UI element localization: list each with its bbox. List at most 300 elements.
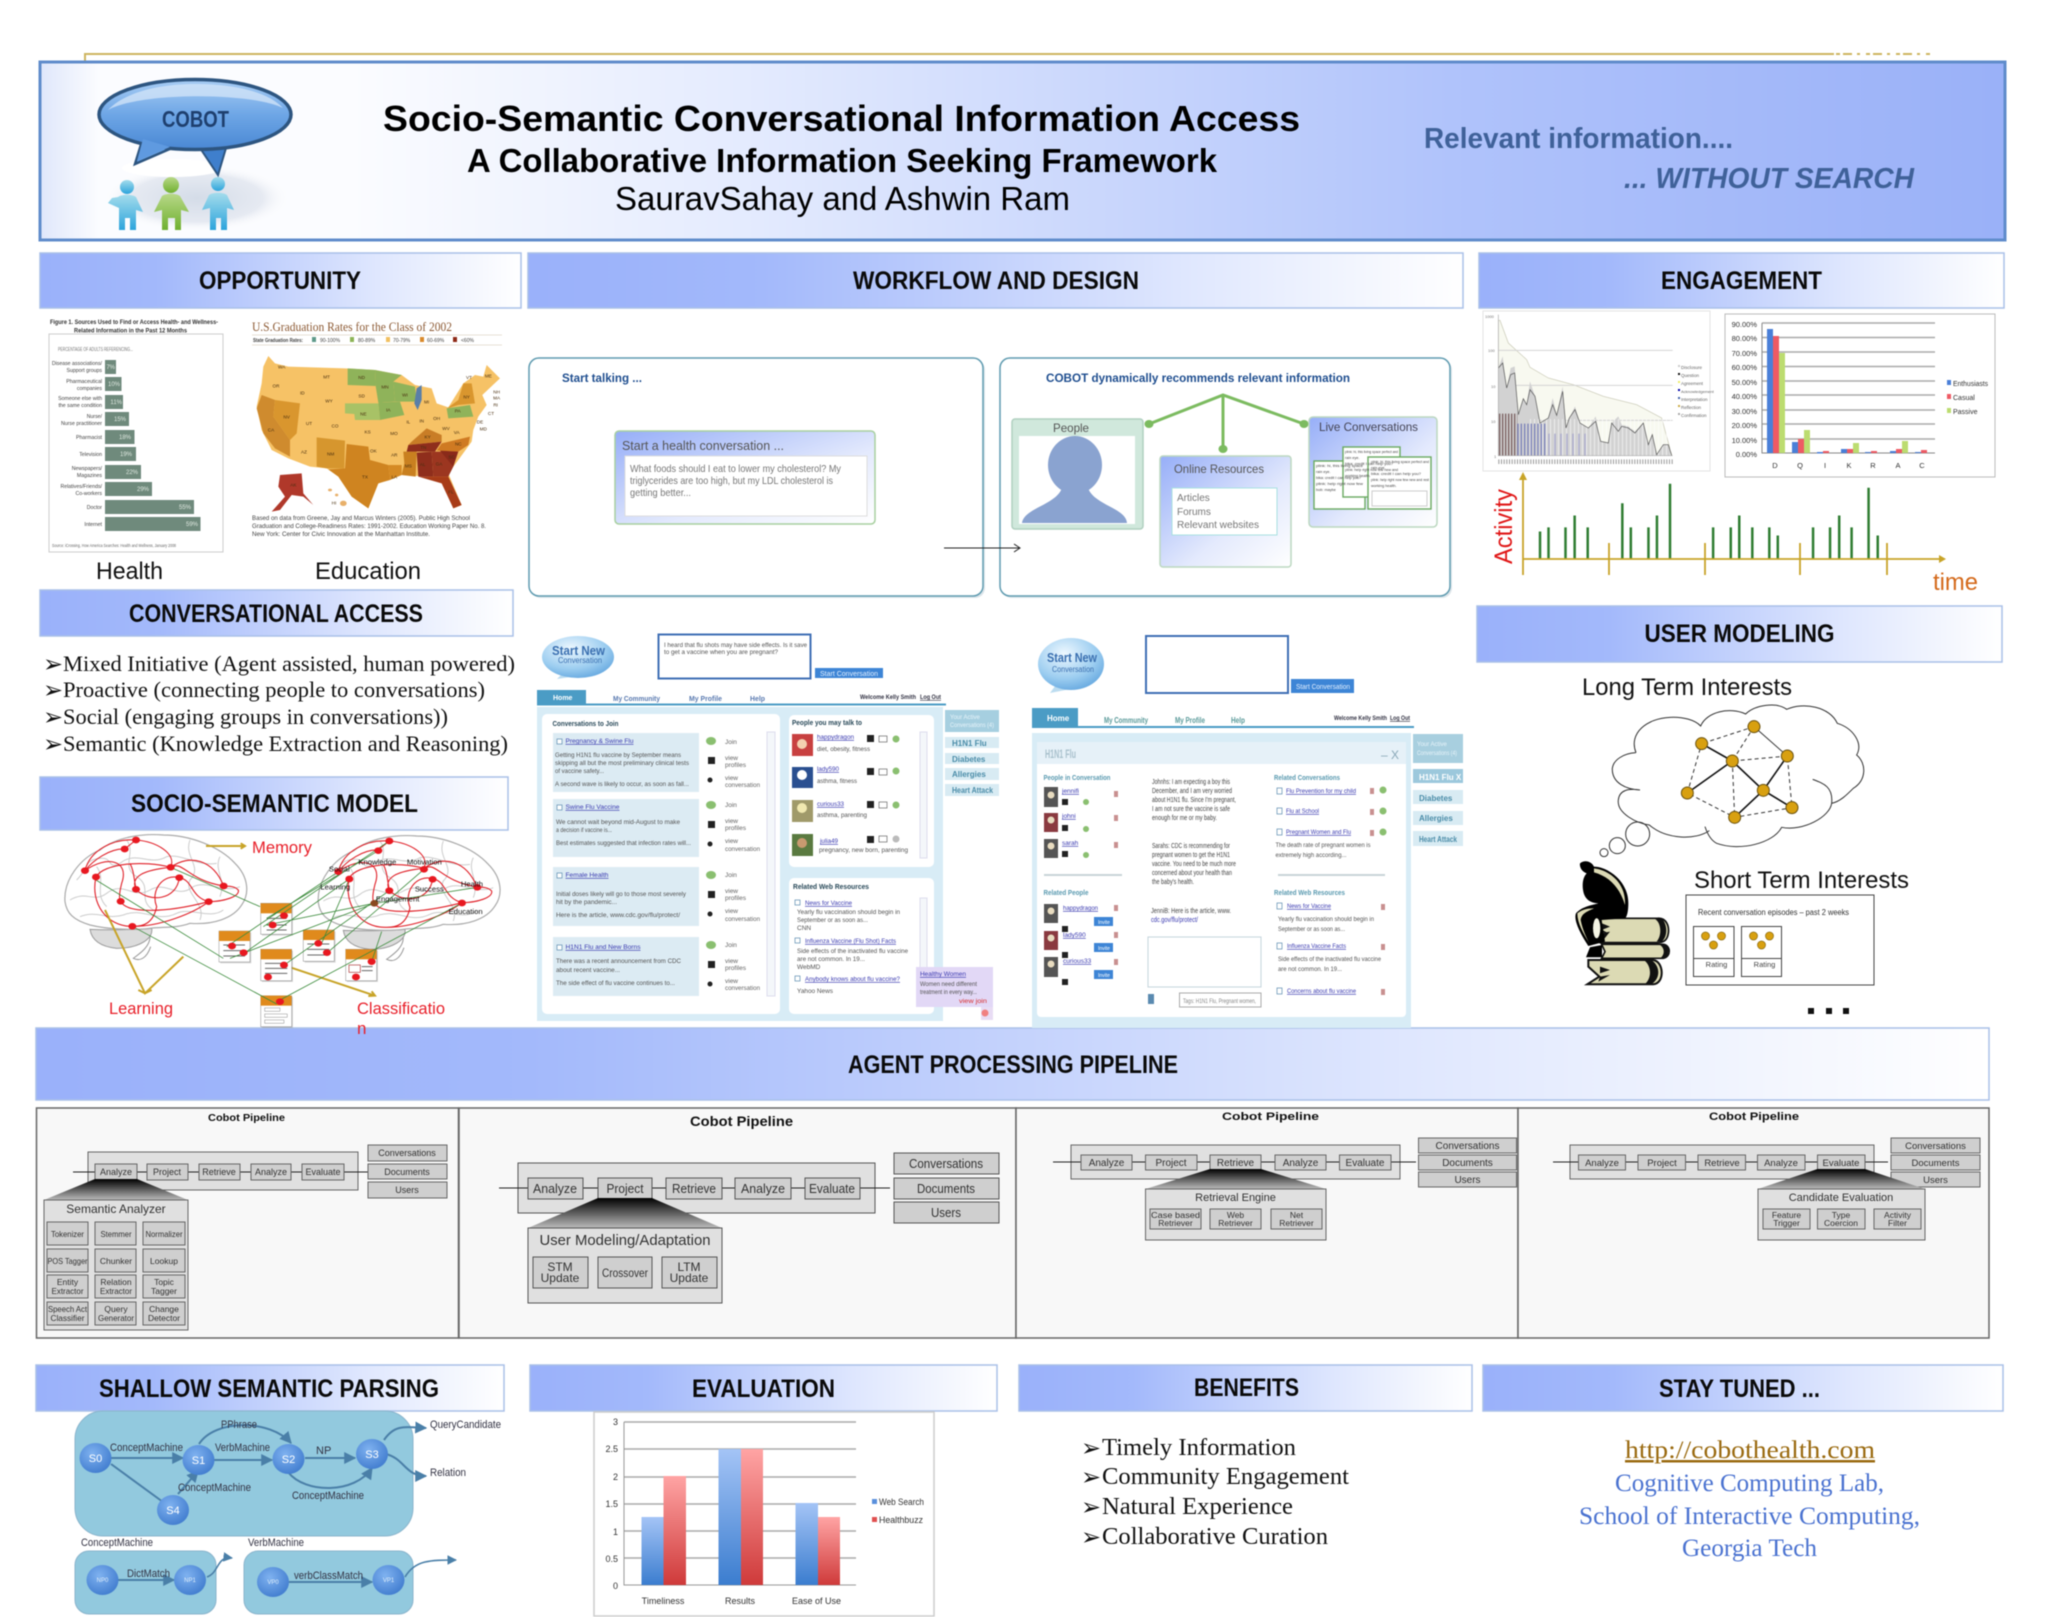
panel: pipeline candidate evaluation: Analyze [1764, 1158, 1798, 1169]
related conversations: extremely high according... [1276, 852, 1347, 859]
panel: engagement bar chart: 80.00% [1732, 334, 1757, 343]
heading: user modeling [1477, 606, 2002, 662]
panel: start talking [529, 358, 985, 598]
people you may talk to: asthma, parenting [817, 812, 867, 819]
navigation bar: Welcome Kelly Smith [1334, 715, 1387, 722]
panel: engagement bar chart: Q [1797, 461, 1803, 470]
panel: US graduation rates map: 60-69% [427, 338, 445, 344]
panel: health bar chart: 19% [120, 452, 133, 458]
panel: health bar chart: Newspapers/ [72, 466, 103, 472]
navigation bar: My Community [1104, 716, 1148, 725]
panel: US graduation rates map: ME [485, 374, 492, 379]
conversations to join: conversation [725, 846, 760, 853]
panel: pipeline semantic analyzer: Normalizer [146, 1229, 183, 1239]
panel: engagement bar chart: Enthusiasts [1953, 381, 1988, 388]
conversations to join: about recent vaccine... [556, 967, 620, 974]
panel: pipeline user modeling: Documents [917, 1181, 975, 1196]
conversations to join: profiles [725, 965, 747, 972]
panel: health bar chart: Television [79, 452, 102, 458]
conversations to join: view [725, 888, 738, 895]
card: online resources: Relevant websites [1177, 520, 1259, 531]
text block: stay tuned contact: School of Interactive Computing, [1579, 1503, 1920, 1530]
panel: health bar chart: 29% [137, 487, 150, 493]
icon: thinker on books [1575, 861, 1669, 984]
panel: pipeline user modeling: User Modeling/Adaptation [540, 1232, 710, 1249]
concept labels: Education [449, 907, 483, 916]
green connections [96, 841, 477, 1004]
panel: US graduation rates map: MS [405, 463, 412, 468]
panel: pipeline user modeling [459, 1108, 1016, 1338]
panel: health bar chart: 7% [106, 365, 116, 371]
text block: conversational access list: Social (engaging groups in conversations)) [63, 704, 448, 729]
card: live conversations: plink: help right now few [1316, 482, 1363, 486]
panel: engagement dialogue act line chart: 1000 [1485, 314, 1495, 319]
header banner [40, 62, 2005, 240]
card: start a health conversation [615, 431, 875, 524]
panel: engagement dialogue act line chart: Disclosure [1681, 365, 1703, 370]
panel: engagement bar chart [1725, 314, 1995, 477]
panel: US graduation rates map: 90-100% [320, 338, 341, 344]
concept labels: Knowledge [358, 858, 396, 867]
chat transcript: concerned about your health than [1152, 870, 1232, 877]
ellipsis [1808, 1008, 1849, 1014]
diagram: shallow semantic parser state machine: S1 [192, 1455, 205, 1467]
panel: pipeline candidate evaluation: Project [1647, 1158, 1677, 1169]
conversations to join: view [725, 775, 738, 782]
conversations to join: Pregnancy & Swine Flu [566, 738, 634, 745]
heading: workflow and design [528, 253, 1463, 308]
icon: start new conversation bubble: Conversation [558, 656, 602, 665]
topic sidebar: Heart Attack [952, 786, 993, 795]
panel: pipeline user modeling: Crossover [602, 1266, 648, 1280]
panel: US graduation rates map: MA [493, 395, 501, 400]
chat transcript: Sarahs: CDC is recommending for [1152, 843, 1230, 850]
panel: health bar chart: Pharmacist [76, 435, 103, 441]
card: live conversations: bob: maybe [1316, 488, 1336, 492]
conversations to join: There was a recent announcement from CDC [556, 958, 681, 965]
concept labels: Learning [320, 882, 350, 891]
popup: healthy women: view join [959, 998, 987, 1005]
card: start a health conversation: Start a health conversation ... [622, 438, 784, 453]
panel: screenshot home page: I heard that flu shots may have side effects. Is it save [664, 642, 807, 649]
navigation bar [537, 690, 946, 705]
panel: US graduation rates map: IL [406, 419, 411, 424]
chat transcript: December, and I am very worried [1152, 788, 1232, 795]
label: classification: Classificatio [357, 999, 445, 1018]
diagram: shallow semantic parser state machine: S2 [282, 1454, 295, 1466]
panel: US graduation rates map: VA [454, 430, 460, 435]
conversations to join: conversation [725, 916, 760, 923]
chart: evaluation bar chart: Healthbuzz [879, 1515, 923, 1525]
panel: pipeline candidate evaluation: Feature [1772, 1210, 1801, 1220]
related web resources: are not common. In 19... [797, 956, 865, 963]
panel: US graduation rates map: AK [290, 483, 297, 488]
diagram: shallow semantic parser state machine: NP0 [97, 1578, 109, 1584]
panel: engagement bar chart: 90.00% [1732, 320, 1757, 329]
chart: evaluation bar chart: Timeliness [642, 1596, 685, 1606]
people you may talk to [792, 718, 927, 858]
people you may talk to: asthma, fitness [817, 778, 858, 785]
heading: socio-semantic model [40, 777, 508, 830]
card: live conversations: rain eye. [1316, 470, 1331, 474]
icon: start new conversation bubble: Conversation [1052, 665, 1094, 674]
panel: pipeline candidate evaluation: Documents [1911, 1158, 1960, 1169]
related conversations: are not common. In 19... [1278, 966, 1342, 973]
panel: US graduation rates map: OH [433, 416, 440, 421]
panel: US graduation rates map: SD [358, 394, 366, 399]
conversations to join: profiles [725, 895, 747, 902]
conversations to join: hit by the pandemic... [556, 899, 617, 906]
panel: pipeline retrieval engine: Retrieval Engine [1195, 1192, 1276, 1204]
panel: pipeline user modeling: Project [606, 1181, 644, 1196]
chart: evaluation bar chart: 0 [613, 1581, 618, 1591]
heading: conversational access: CONVERSATIONAL ACCESS [129, 600, 423, 628]
panel: US graduation rates map: 70-79% [393, 338, 411, 344]
panel: pipeline retrieval engine: Retriever [1158, 1218, 1193, 1228]
panel: US graduation rates map: TN [420, 445, 426, 450]
text block: benefits list: Natural Experience [1102, 1494, 1293, 1520]
related web resources: Yahoo News [797, 988, 834, 995]
panel: pipeline semantic analyzer: Classifier [50, 1313, 85, 1323]
title: Socio-Semantic Conversational Information Access [383, 98, 1300, 139]
heading: shallow semantic parsing [36, 1365, 504, 1411]
card: live conversations: plink: help right now few new and [1345, 468, 1398, 472]
panel: engagement dialogue act line chart: Agreement [1681, 381, 1704, 386]
title: SauravSahay and Ashwin Ram [615, 180, 1070, 217]
people in conversation: Invite [1098, 920, 1110, 926]
panel: pipeline user modeling: Analyze [533, 1181, 577, 1196]
heading: opportunity [40, 253, 521, 308]
diagram: shallow semantic parser state machine: VerbMachine [215, 1442, 270, 1454]
icon: brain right [318, 836, 500, 961]
people you may talk to: lady590 [817, 766, 839, 773]
card: start a health conversation: getting better... [630, 487, 691, 499]
conversations to join: Initial doses likely will go to those most severely [556, 891, 687, 898]
heading: shallow semantic parsing: SHALLOW SEMANTIC PARSING [99, 1375, 439, 1403]
text block: stay tuned contact: http://cobothealth.com [1625, 1437, 1876, 1464]
panel: pipeline retrieval engine: Retriever [1279, 1218, 1314, 1228]
panel: health bar chart: the same condition [58, 403, 102, 409]
tagline: ... WITHOUT SEARCH [1624, 163, 1915, 195]
panel: recent episodes: Rating [1754, 960, 1775, 969]
conversations to join: We cannot wait beyond mid-August to make [556, 819, 680, 826]
related conversations: Pregnant Women and Flu [1286, 829, 1351, 836]
card: live conversations [1309, 417, 1437, 527]
title: A Collaborative Information Seeking Framework [467, 142, 1218, 179]
heading: conversational access [40, 590, 513, 636]
panel: pipeline semantic analyzer: Stemmer [100, 1229, 132, 1239]
panel: pipeline semantic analyzer: Semantic Analyzer [66, 1202, 166, 1216]
panel: pipeline retrieval engine: Conversations [1436, 1141, 1499, 1152]
panel: pipeline semantic analyzer: Evaluate [305, 1167, 341, 1177]
panel: engagement dialogue act line chart: 10 [1491, 384, 1496, 389]
heading: evaluation: EVALUATION [692, 1375, 835, 1403]
conversations to join: The side effect of flu vaccine continues to... [556, 980, 675, 987]
panel: pipeline candidate evaluation: Trigger [1773, 1218, 1800, 1228]
panel: pipeline semantic analyzer: Documents [384, 1167, 430, 1177]
panel: US graduation rates map: CO [331, 424, 339, 429]
diagram: shallow semantic parser state machine: DictMatch [127, 1568, 170, 1580]
red nodes [81, 837, 481, 1005]
topic sidebar: Diabetes [1419, 794, 1453, 803]
panel: US graduation rates map: KS [365, 429, 371, 434]
card: live conversations: bika: credit I can help you? [1316, 476, 1361, 480]
conversations to join: Here is the article, www.cdc.gov/flu/protect/ [556, 912, 680, 919]
chart: evaluation bar chart: Results [725, 1596, 756, 1606]
topic sidebar: H1N1 Flu X [1419, 773, 1462, 782]
text block: benefits list [1081, 1434, 1349, 1551]
panel: US graduation rates map: IN [419, 418, 424, 423]
panel: health bar chart: Figure 1. Sources Used to Find or Access Health- and Wellness- [50, 319, 218, 326]
people in conversation: sarah [1062, 840, 1079, 847]
text block: conversational access list: ➢ [43, 703, 63, 731]
popup: healthy women: Healthy Women [920, 971, 966, 978]
panel: pipeline user modeling: Retrieve [672, 1181, 716, 1196]
panel: US graduation rates map: FL [448, 489, 454, 494]
conversations to join: view [725, 755, 738, 762]
conversations to join: Join [725, 739, 737, 746]
diagram: shallow semantic parser state machine: VP0 [267, 1580, 279, 1586]
panel: health bar chart: Disease associations/ [52, 361, 103, 367]
chat transcript: vaccine. You need to be much more [1152, 861, 1236, 868]
panel: engagement bar chart: 70.00% [1732, 349, 1757, 358]
icon: start new conversation bubble: Start New [1047, 650, 1098, 665]
panel: pipeline semantic analyzer: Analyze [100, 1167, 132, 1177]
heading: evaluation [530, 1365, 997, 1411]
diagram: shallow semantic parser state machine: S0 [89, 1453, 102, 1465]
icon: thought cloud [1600, 705, 1864, 857]
panel: US graduation rates map: AR [391, 453, 398, 458]
panel: US graduation rates map: MD [480, 427, 488, 432]
card: live conversations: bika: credit I can help you? [1371, 472, 1421, 476]
navigation bar: Help [750, 696, 765, 703]
card: online resources: Online Resources [1174, 462, 1264, 476]
panel: US graduation rates map: TX [362, 474, 369, 479]
related web resources: Influenza Vaccine (Flu Shot) Facts [805, 938, 897, 945]
panel: engagement bar chart: C [1919, 461, 1925, 470]
panel: US graduation rates map: MO [390, 431, 398, 436]
diagram: shallow semantic parser state machine: ConceptMachine [292, 1490, 364, 1502]
panel: pipeline semantic analyzer: Users [395, 1185, 419, 1195]
panel: pipeline candidate evaluation: Activity [1884, 1210, 1912, 1220]
panel: pipeline semantic analyzer: Retrieve [202, 1167, 236, 1177]
panel: pipeline retrieval engine: Cobot Pipeline [1222, 1111, 1319, 1123]
navigation bar: Help [1231, 716, 1245, 725]
people you may talk to: curious33 [817, 801, 844, 808]
icon: COBOT speech bubble logo [99, 80, 291, 232]
card: live conversations: plink: hi, this living space perfect and [1345, 450, 1398, 454]
panel: pipeline retrieval engine: Retriever [1218, 1218, 1253, 1228]
text block: stay tuned contact: Cognitive Computing Lab, [1615, 1470, 1884, 1497]
panel: health bar chart: Magazines [77, 473, 102, 479]
panel: US graduation rates map: 80-89% [358, 338, 376, 344]
panel: screenshot H1N1 conversation: Start Conversation [1296, 682, 1350, 691]
panel: health bar chart: Someone else with [58, 396, 102, 402]
green connectors [1144, 395, 1308, 453]
panel: pipeline candidate evaluation: Coercion [1824, 1218, 1858, 1228]
panel: engagement bar chart: Passive [1953, 409, 1978, 416]
conversations to join: H1N1 Flu and New Borns [566, 944, 641, 951]
panel: pipeline candidate evaluation: Filter [1888, 1218, 1907, 1228]
panel: pipeline semantic analyzer: Query [104, 1304, 128, 1314]
heading: socio-semantic model: SOCIO-SEMANTIC MODEL [131, 790, 418, 818]
text block: stay tuned contact: Georgia Tech [1682, 1535, 1817, 1562]
topic sidebar: H1N1 Flu [952, 739, 987, 748]
panel: engagement dialogue act line chart [1483, 311, 1715, 471]
heading: agent processing pipeline: AGENT PROCESSING PIPELINE [848, 1051, 1178, 1079]
panel: pipeline user modeling: Evaluate [809, 1181, 855, 1196]
panel: screenshot H1N1 conversation [1032, 636, 1463, 1028]
navigation bar: Home [1047, 714, 1070, 723]
conversations to join: view [725, 978, 738, 985]
tagline: Relevant information.... [1424, 123, 1733, 155]
heading: opportunity: OPPORTUNITY [199, 267, 361, 295]
people in conversation: curious33 [1063, 958, 1092, 965]
panel: screenshot home page: to get a vaccine when you are pregnant? [664, 649, 778, 656]
navigation bar: Log Out [1390, 715, 1411, 722]
panel: health bar chart [49, 319, 223, 552]
panel: health bar chart: Source: iCrossing, How America Searches: Health and Wellness, January 2008 [52, 543, 176, 548]
panel: US graduation rates map: NY [463, 394, 470, 399]
related web resources: September or as soon as... [797, 917, 868, 924]
related web resources: News for Vaccine [805, 900, 852, 907]
people you may talk to: julia49 [819, 838, 838, 845]
popup: healthy women [916, 967, 993, 1020]
panel: pipeline retrieval engine: Net [1290, 1210, 1304, 1220]
panel: engagement dialogue act line chart: Acknowledgement [1681, 389, 1715, 394]
card: live conversations: rain eye. [1371, 466, 1386, 470]
panel: US graduation rates map: WY [325, 399, 333, 404]
heading: stay tuned [1483, 1365, 2003, 1411]
panel: engagement bar chart: 60.00% [1732, 363, 1757, 372]
conversations to join: conversation [725, 985, 760, 992]
panel: pipeline retrieval engine: Users [1454, 1175, 1481, 1186]
chart: activity over time [1490, 472, 1978, 596]
label: learning: Learning [109, 999, 173, 1018]
card: start a health conversation: What foods should I eat to lower my cholesterol? My [630, 463, 842, 475]
related web resources: Related Web Resources [793, 882, 869, 891]
topic sidebar [1413, 734, 1463, 846]
related conversations: The death rate of pregnant women is [1276, 842, 1371, 849]
panel: US graduation rates map: KY [425, 434, 431, 439]
panel: pipeline semantic analyzer: Relation [100, 1277, 132, 1287]
card: live conversations: working health. [1345, 474, 1371, 478]
label: classification [357, 999, 445, 1038]
panel: health bar chart: 55% [179, 505, 192, 511]
heading: workflow and design: WORKFLOW AND DESIGN [853, 267, 1139, 295]
people in conversation: johni [1061, 813, 1076, 820]
diagram: shallow semantic parser state machine: NP [316, 1445, 331, 1457]
conversations to join: a decision if vaccine is... [556, 827, 612, 834]
panel: recent episodes: Rating [1706, 960, 1727, 969]
text block: benefits list: Collaborative Curation [1102, 1524, 1328, 1550]
text block: benefits list: Timely Information [1102, 1435, 1296, 1461]
panel: US graduation rates map: NM [327, 452, 334, 457]
card: online resources [1160, 456, 1291, 567]
panel: pipeline retrieval engine: Analyze [1089, 1158, 1125, 1169]
navigation bar: Welcome Kelly Smith [860, 695, 916, 701]
card: live conversations: plink: hi, this living space [1316, 464, 1363, 468]
panel: engagement dialogue act line chart: Question [1681, 373, 1700, 378]
panel: health bar chart: Nurse/ [87, 414, 103, 420]
label: memory: Memory [252, 838, 312, 857]
topic sidebar: Your Active [950, 715, 980, 721]
panel: US graduation rates map: AL [420, 462, 426, 467]
topic sidebar: Conversations (4) [950, 723, 994, 729]
panel: health bar chart: Relatives/Friends/ [60, 484, 103, 490]
panel: US graduation rates map: OR [273, 384, 280, 389]
panel: US graduation rates map: ND [358, 375, 366, 380]
people you may talk to: diet, obesity, fitness [817, 746, 871, 753]
popup: healthy women: treatment in every way... [920, 989, 977, 996]
panel: engagement bar chart: K [1846, 461, 1852, 470]
related conversations: Concerns about flu vaccine [1287, 988, 1356, 995]
diagram: shallow semantic parser state machine: ConceptMachine [81, 1537, 153, 1549]
tagline [1424, 123, 1915, 195]
people in conversation: People in Conversation [1044, 773, 1111, 782]
topic sidebar: Allergies [1419, 814, 1453, 823]
chat transcript: Johnhs: I am expecting a boy this [1152, 779, 1230, 786]
diagram: shallow semantic parser state machine: S4 [166, 1505, 180, 1517]
people you may talk to: happydragon [817, 734, 854, 741]
panel: US graduation rates map: UT [306, 421, 312, 426]
conversations to join: profiles [725, 762, 747, 769]
panel: health bar chart: Doctor [87, 505, 102, 511]
card: live conversations: working health. [1371, 484, 1397, 488]
navigation bar [1032, 708, 1414, 728]
panel: pipeline candidate evaluation: Type [1832, 1210, 1850, 1220]
panel: US graduation rates map: VT [466, 375, 472, 380]
icon: brain left [65, 835, 247, 960]
conversations to join: view [725, 838, 738, 845]
conversations to join: conversation [725, 782, 760, 789]
panel: pipeline semantic analyzer: Analyze [255, 1167, 287, 1177]
topic sidebar: Diabetes [952, 755, 986, 764]
chat transcript: enough for me or my baby. [1152, 815, 1217, 822]
panel: health bar chart: 18% [119, 435, 132, 441]
heading: engagement [1479, 253, 2004, 308]
label: activity: Activity [1490, 489, 1518, 564]
conversations to join: Best estimates suggested that infection rates will... [556, 840, 691, 847]
panel: health bar chart: Nurse practitioner [61, 421, 102, 427]
related web resources: WebMD [797, 964, 821, 971]
panel: US graduation rates map: MN [381, 384, 389, 389]
panel: US graduation rates map: RI [493, 403, 498, 408]
topic sidebar: Allergies [952, 770, 986, 779]
panel: COBOT recommends: COBOT dynamically recommends relevant information [1046, 373, 1350, 385]
panel: pipeline retrieval engine: Evaluate [1346, 1158, 1385, 1169]
panel: US graduation rates map: MT [323, 374, 330, 379]
related conversations: Related Conversations [1274, 773, 1340, 782]
panel: health bar chart: Co-workers [75, 491, 102, 497]
chart: evaluation bar chart: Web Search [879, 1497, 924, 1507]
gold arrows [105, 843, 375, 996]
conversations to join: profiles [725, 825, 747, 832]
panel: pipeline retrieval engine: Case based [1151, 1210, 1200, 1220]
text block: conversational access list: Mixed Initiative (Agent assisted, human powered) [63, 651, 515, 676]
diagram: shallow semantic parser state machine: QueryCandidate [430, 1419, 501, 1431]
panel: engagement dialogue act line chart: 1 [1494, 454, 1497, 459]
panel: engagement bar chart: 10.00% [1732, 436, 1757, 445]
chat transcript: the baby's health. [1152, 879, 1194, 886]
diagram: shallow semantic parser state machine: VerbMachine [248, 1537, 304, 1549]
text block: benefits list: Community Engagement [1102, 1464, 1349, 1490]
conversations to join: Conversations to Join [552, 719, 619, 728]
heading: agent processing pipeline [36, 1028, 1989, 1100]
panel: pipeline candidate evaluation: Cobot Pipeline [1709, 1111, 1799, 1123]
panel: screenshot home page: Start Conversation [820, 671, 878, 678]
icon: start new conversation bubble [1038, 638, 1104, 693]
